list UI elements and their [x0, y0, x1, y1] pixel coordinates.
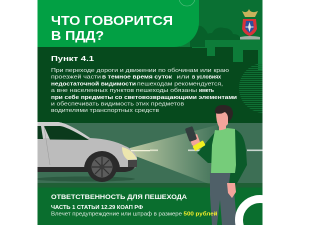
heading: liability: ОТВЕТСТВЕННОСТЬ ДЛЯ ПЕШЕХОДА [51, 194, 187, 201]
road [38, 123, 262, 183]
headlight beam [130, 125, 217, 187]
text block: rule body: пешеходам рекомендуется, [137, 81, 224, 87]
text block: rule body: иметь [199, 88, 215, 94]
title pill [38, 0, 199, 47]
text block: rule body: а вне населенных пунктов пешеходы обязаны [51, 88, 197, 94]
background panel: sky [174, 0, 262, 47]
text block: rule body [51, 68, 237, 114]
heading: rule number: Пункт 4.1 [51, 54, 95, 63]
panel: rule text background [38, 47, 262, 123]
emblem [240, 9, 260, 40]
text block: rule body: при себе предметы со световозвращающими элементами [51, 94, 237, 101]
title: В ПДД? [51, 29, 104, 43]
penalty amount: 500 рублей [184, 211, 218, 218]
text block: rule body: водителями транспортных средств [51, 108, 159, 114]
road shoulder [38, 183, 262, 188]
road markings [150, 150, 263, 151]
text block: rule body: и обеспечивать видимость этих предметов [51, 102, 184, 108]
title: ЧТО ГОВОРИТСЯ [51, 14, 173, 28]
text block: rule body: в темное время суток [102, 75, 172, 81]
infographic [38, 0, 262, 225]
title [51, 14, 173, 43]
text block: rule body: недостаточной видимости [51, 80, 136, 87]
footer panel [38, 188, 262, 225]
article reference: ЧАСТЬ 1 СТАТЬИ 12.29 КОАП РФ [51, 205, 144, 211]
text block: rule body: или [176, 75, 190, 81]
decorative striped circle [239, 64, 262, 113]
text block: rule body: При переходе дороги и движении по обочинам или краю [51, 68, 229, 74]
penalty text: Влечет предупреждение или штраф в размере [51, 212, 182, 218]
lighter skyline band [180, 40, 263, 70]
white swoosh [235, 195, 262, 225]
text block: rule body: проезжей части [51, 74, 101, 81]
car [35, 122, 150, 182]
person [185, 105, 247, 225]
clouds [190, 26, 241, 47]
text block: rule body: в условиях [192, 75, 221, 81]
decorative ring [179, 0, 195, 6]
